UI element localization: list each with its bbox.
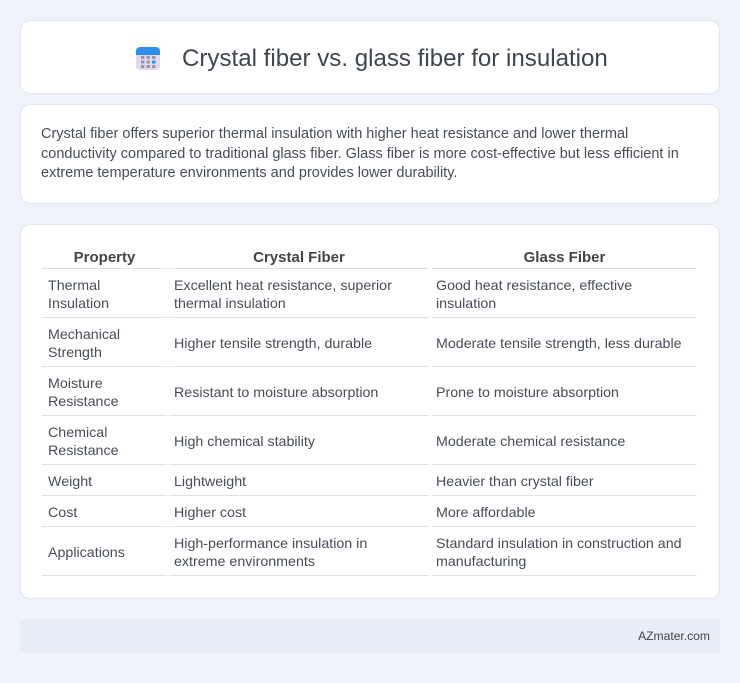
title card xyxy=(20,20,720,94)
comparison table: Insulation xyxy=(48,296,109,312)
comparison table: insulation xyxy=(436,296,496,312)
comparison table: High chemical stability xyxy=(174,434,315,450)
comparison table: Lightweight xyxy=(174,474,246,490)
comparison table: More affordable xyxy=(436,505,536,521)
comparison table: Heavier than crystal fiber xyxy=(436,474,594,490)
comparison table: Standard insulation in construction and xyxy=(436,536,682,552)
comparison table: Glass Fiber xyxy=(524,249,605,266)
comparison table: Moderate tensile strength, less durable xyxy=(436,336,682,352)
comparison table: Higher tensile strength, durable xyxy=(174,336,372,352)
comparison table: thermal insulation xyxy=(174,296,286,312)
icon: calendar xyxy=(136,47,160,70)
comparison table: Excellent heat resistance, superior xyxy=(174,278,392,294)
comparison table: Cost xyxy=(48,505,77,521)
comparison table: Crystal Fiber xyxy=(253,249,345,266)
table card xyxy=(20,224,720,599)
comparison table: Strength xyxy=(48,345,102,361)
comparison table: Mechanical xyxy=(48,327,120,343)
summary text: conductivity compared to traditional glass fiber. Glass fiber is more cost-effective but less efficient in xyxy=(41,146,679,162)
footer bar xyxy=(20,619,720,653)
comparison table: extreme environments xyxy=(174,554,315,570)
comparison table: Chemical xyxy=(48,425,107,441)
comparison table: Higher cost xyxy=(174,505,246,521)
comparison table: Resistant to moisture absorption xyxy=(174,385,378,401)
summary card xyxy=(20,104,720,204)
comparison table: Resistance xyxy=(48,443,118,459)
comparison table: Moisture xyxy=(48,376,103,392)
footer text: AZmater.com: AZmater.com xyxy=(638,629,710,643)
comparison table: Good heat resistance, effective xyxy=(436,278,632,294)
summary text: extreme temperature environments and provides lower durability. xyxy=(41,165,457,181)
summary text xyxy=(41,126,679,181)
summary text: Crystal fiber offers superior thermal insulation with higher heat resistance and lower thermal xyxy=(41,126,628,142)
comparison table: Prone to moisture absorption xyxy=(436,385,619,401)
title: Crystal fiber vs. glass fiber for insulation xyxy=(182,45,608,72)
comparison table: Weight xyxy=(48,474,92,490)
comparison table: Resistance xyxy=(48,394,118,410)
comparison table: High-performance insulation in xyxy=(174,536,367,552)
comparison table: Thermal xyxy=(48,278,100,294)
comparison table: manufacturing xyxy=(436,554,526,570)
comparison table: Property xyxy=(74,249,135,266)
comparison table: Applications xyxy=(48,545,125,561)
comparison table: Moderate chemical resistance xyxy=(436,434,625,450)
